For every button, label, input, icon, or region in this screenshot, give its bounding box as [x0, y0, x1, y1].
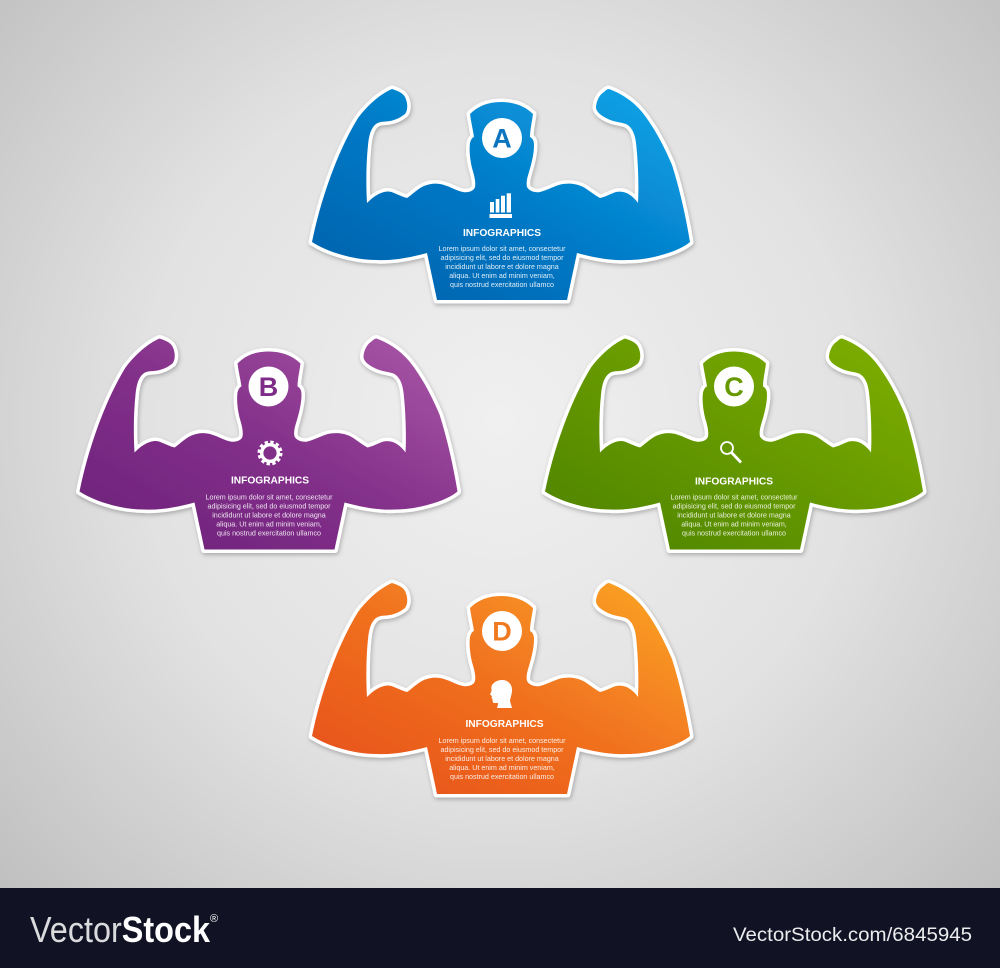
body text C — [670, 494, 798, 538]
icon: gear — [259, 442, 281, 464]
body text B — [206, 494, 333, 538]
footer logo: VectorStock — [30, 909, 211, 950]
body text B: incididunt ut labore et dolore magna — [212, 512, 326, 520]
icon: head profile — [490, 680, 512, 708]
heading A: INFOGRAPHICS — [463, 228, 541, 239]
body text A: quis nostrud exercitation ullamco — [450, 281, 554, 289]
letter badge B — [248, 366, 288, 406]
body text D: quis nostrud exercitation ullamco — [450, 773, 554, 781]
panel: A — [312, 89, 690, 300]
letter badge B: B — [259, 372, 278, 402]
body text D: aliqua. Ut enim ad minim veniam, — [449, 764, 555, 772]
body text A: aliqua. Ut enim ad minim veniam, — [449, 272, 555, 280]
letter badge D — [482, 611, 522, 651]
silhouette C — [545, 338, 923, 550]
body text D: incididunt ut labore et dolore magna — [445, 755, 559, 763]
body text A: Lorem ipsum dolor sit amet, consectetur — [438, 245, 566, 253]
heading C: INFOGRAPHICS — [695, 476, 773, 488]
body text C: aliqua. Ut enim ad minim veniam, — [681, 520, 787, 528]
footer band — [0, 888, 1000, 968]
body text A — [438, 245, 566, 289]
silhouette D — [312, 583, 690, 794]
body text C: incididunt ut labore et dolore magna — [677, 512, 791, 520]
body text B: aliqua. Ut enim ad minim veniam, — [216, 520, 322, 528]
body text B: quis nostrud exercitation ullamco — [217, 530, 321, 538]
body text B: Lorem ipsum dolor sit amet, consectetur — [206, 494, 333, 502]
body text B: adipisicing elit, sed do eiusmod tempor — [207, 502, 331, 510]
body text C: adipisicing elit, sed do eiusmod tempor — [672, 502, 796, 510]
letter badge C: C — [724, 372, 744, 402]
footer id: VectorStock.com/6845945 — [733, 924, 972, 946]
registered mark: ® — [210, 913, 218, 925]
icon: bar chart — [490, 193, 512, 218]
icon: magnifier — [721, 442, 741, 462]
panel: D — [312, 583, 690, 794]
heading B: INFOGRAPHICS — [231, 476, 309, 486]
panel: B — [80, 338, 458, 550]
body text D: Lorem ipsum dolor sit amet, consectetur — [438, 737, 566, 745]
silhouette B — [80, 338, 458, 550]
letter badge D: D — [492, 616, 512, 646]
body text C: quis nostrud exercitation ullamco — [682, 530, 786, 538]
body text D — [438, 737, 566, 781]
letter badge C — [714, 366, 754, 406]
letter badge A — [482, 118, 522, 158]
silhouette A — [312, 89, 690, 300]
panel: C — [545, 338, 923, 550]
letter badge A: A — [492, 124, 512, 154]
body text A: adipisicing elit, sed do eiusmod tempor — [440, 254, 564, 262]
body text D: adipisicing elit, sed do eiusmod tempor — [440, 746, 564, 754]
body text C: Lorem ipsum dolor sit amet, consectetur — [670, 494, 798, 502]
heading D: INFOGRAPHICS — [465, 719, 544, 730]
body text A: incididunt ut labore et dolore magna — [445, 263, 559, 271]
